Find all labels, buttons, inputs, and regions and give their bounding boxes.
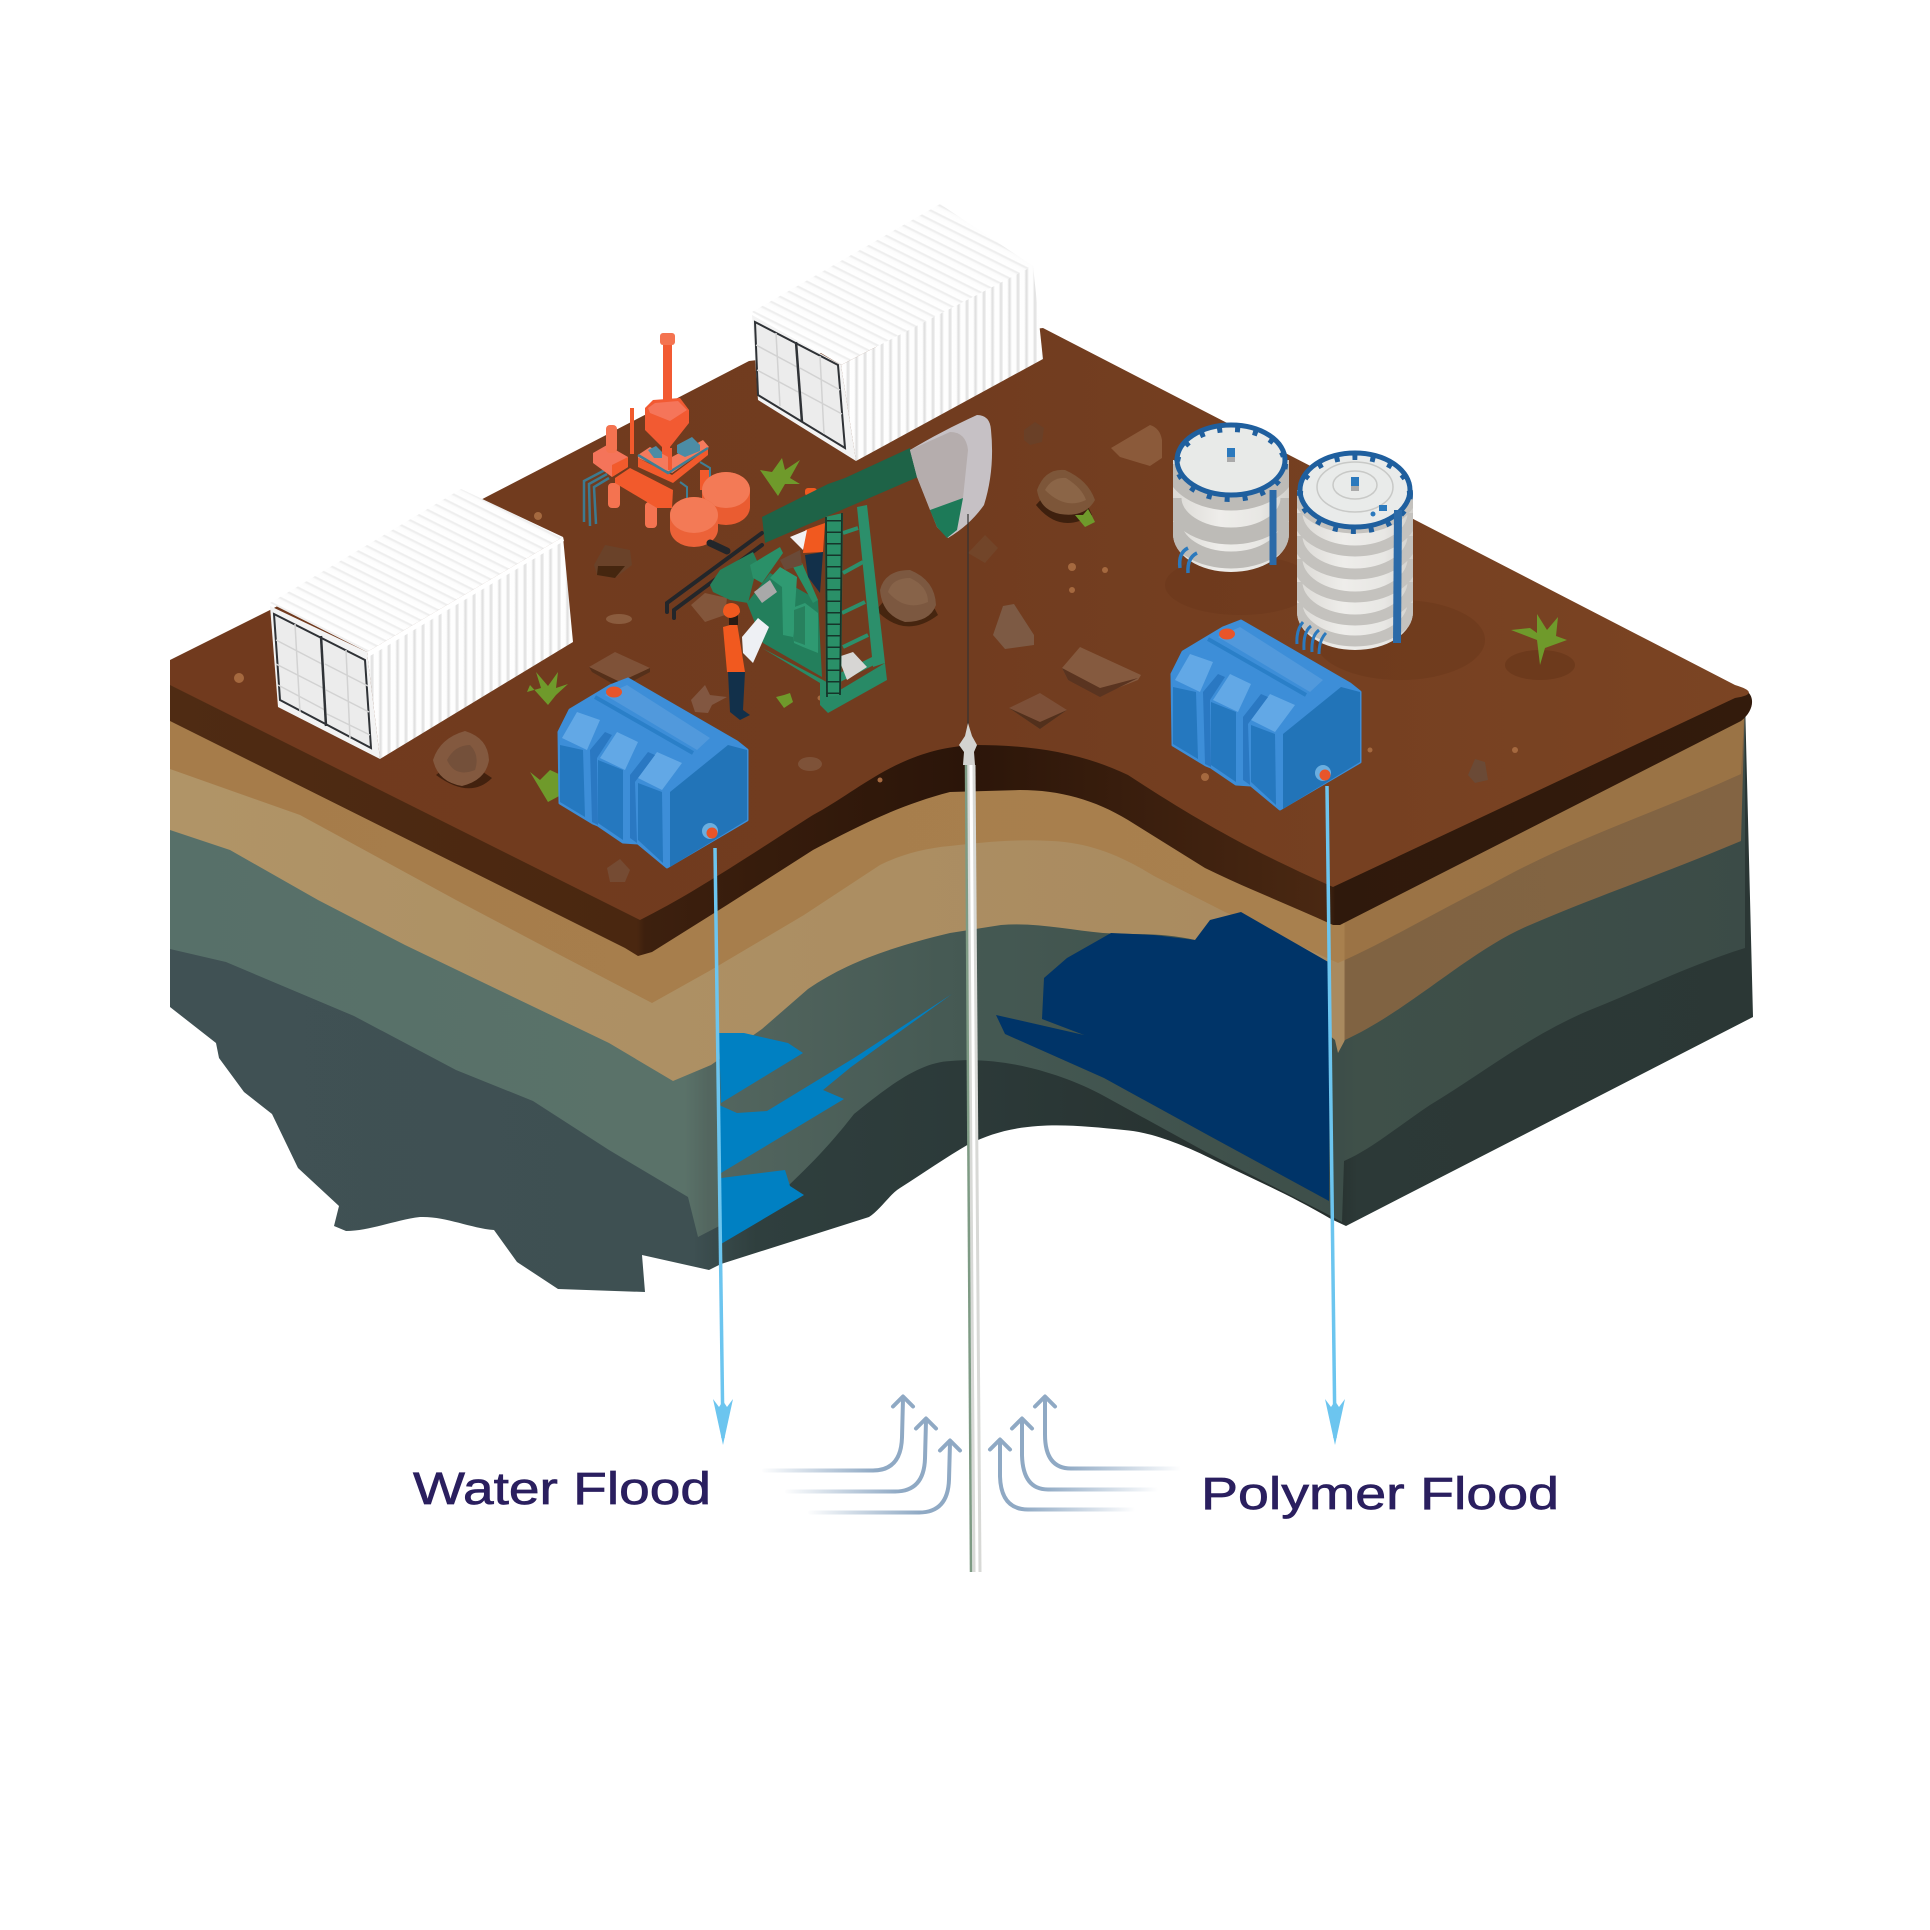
oil zone: polymer flood front xyxy=(996,912,1330,1201)
soil layer: dark band under the surface xyxy=(170,660,1752,956)
pumpjack xyxy=(710,415,992,713)
label: Polymer Flood: Polymer Flood xyxy=(1201,1468,1559,1519)
arrows: inflow from water flood side xyxy=(764,1396,960,1512)
arrows: inflow from polymer flood side xyxy=(990,1396,1181,1510)
container: left shipping container xyxy=(270,489,573,759)
worker with plans xyxy=(723,603,769,720)
plants xyxy=(527,458,1567,802)
blue tank: water flood xyxy=(559,679,747,867)
rock layer: grey-green stratum xyxy=(170,680,1745,1237)
rock layer: light sand stratum xyxy=(170,680,1745,1081)
rock layer: deepest dark stratum xyxy=(170,680,1753,1292)
rock layer: ochre stratum xyxy=(170,680,1745,1003)
icon: blue-grey pipes xyxy=(584,470,609,526)
arrow: polymer flood injection xyxy=(1325,786,1345,1445)
surface shadows and dots xyxy=(234,512,1575,782)
label: Water Flood: Water Flood xyxy=(413,1463,711,1514)
blue tank: polymer flood xyxy=(1172,621,1360,809)
storage tank: left xyxy=(1173,425,1289,573)
panel: ground block cross-section xyxy=(170,660,1753,1292)
water zone: water flood fingers xyxy=(719,994,952,1244)
base frame xyxy=(762,648,887,713)
container: rear shipping container xyxy=(752,204,1043,461)
worker behind pumpjack xyxy=(790,488,825,593)
ladder xyxy=(825,513,843,697)
walking beam xyxy=(762,448,918,543)
wellbore: production pipe and wellhead xyxy=(959,514,977,1572)
rocks xyxy=(433,422,1488,882)
orange processing unit xyxy=(584,333,750,547)
icon: black feed pipes xyxy=(667,533,762,618)
icon: orange drums xyxy=(670,472,750,547)
storage tank: right xyxy=(1297,453,1413,654)
ground surface xyxy=(170,328,1749,920)
white base block xyxy=(838,652,867,680)
arrow: water flood injection xyxy=(713,848,733,1445)
tower legs and braces xyxy=(835,505,885,680)
icon: orange machinery xyxy=(593,333,710,528)
gearbox and cranks xyxy=(710,547,822,677)
horsehead xyxy=(910,415,992,538)
